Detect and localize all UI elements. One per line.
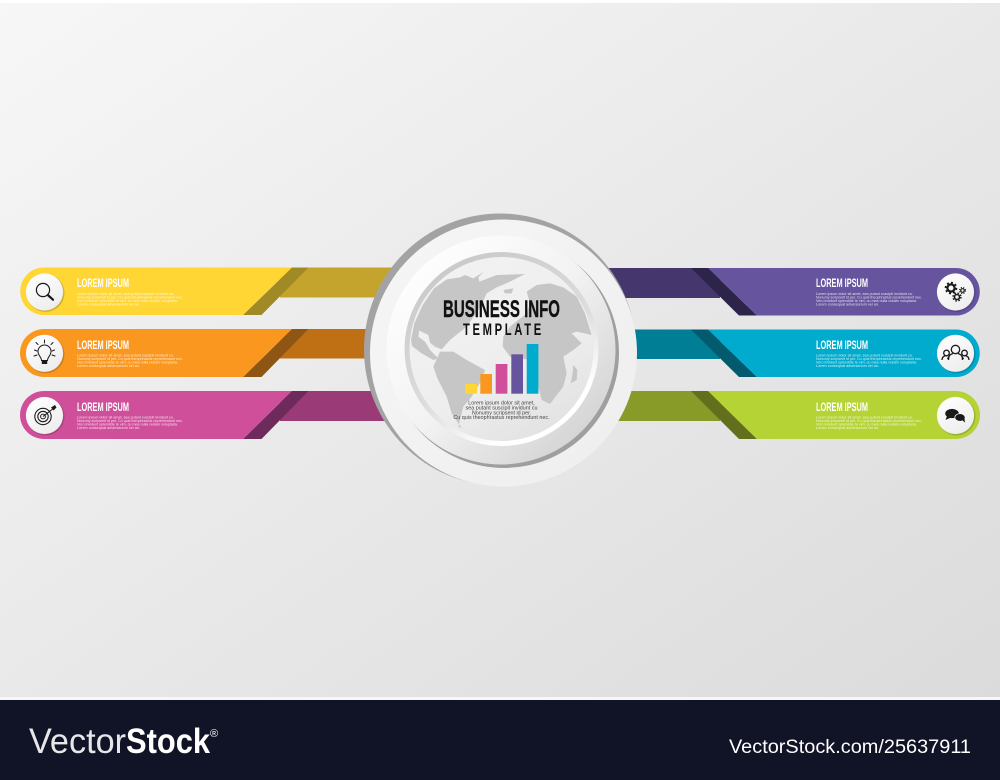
center text block: Lorem ipsum dolor sit amet, <box>468 400 535 406</box>
text block: Lorem consequat adversarium vel an. <box>816 302 879 306</box>
text block: Nonumy scripserit id per. Cu quis theophrastus reprehendunt nec. <box>816 296 922 300</box>
panel: magenta bar <box>20 391 420 439</box>
text block: Lorem ipsum dolor sit amet, sea putant suscipit invidunt cu. <box>816 416 913 420</box>
center text block: Nonumy scripsent id per. <box>472 410 531 416</box>
text block: Nonumy scripserit id per. Cu quis theophrastus reprehendunt nec. <box>77 357 183 361</box>
text block: Lorem consequat adversarium vel an. <box>816 426 879 430</box>
text block: Nonumy scripserit id per. Cu quis theophrastus reprehendunt nec. <box>816 419 922 423</box>
text block: Lorem consequat adversarium vel an. <box>77 426 140 430</box>
text block: Vero invidunt splendide te vim, cu mea nulla nullam voluptaria. <box>77 360 178 364</box>
heading: LOREM IPSUM <box>816 400 868 414</box>
text block <box>816 416 922 430</box>
text block: Vero invidunt splendide te vim, cu mea nulla nullam voluptaria. <box>77 422 178 426</box>
panel: cyan bar <box>590 330 980 377</box>
heading: LOREM IPSUM <box>816 276 868 290</box>
logo: ® <box>210 728 218 740</box>
text block: Lorem ipsum dolor sit amet, sea putant suscipit invidunt cu. <box>77 354 174 358</box>
center text block: Cu quis theophrastus reprehendunt nec. <box>453 415 550 421</box>
text block: Lorem ipsum dolor sit amet, sea putant suscipit invidunt cu. <box>816 292 913 296</box>
heading: LOREM IPSUM <box>816 338 868 352</box>
text block: Vero invidunt splendide te vim, cu mea nulla nullam voluptaria. <box>77 299 178 303</box>
text block <box>77 354 183 368</box>
icon: people <box>937 335 976 373</box>
footer band <box>0 697 1000 780</box>
text block: Vero invidunt splendide te vim, cu mea nulla nullam voluptaria. <box>816 422 917 426</box>
heading: LOREM IPSUM <box>77 400 129 414</box>
globe map <box>411 272 592 428</box>
text block: Nonumy scripserit id per. Cu quis theophrastus reprehendunt nec. <box>77 296 183 300</box>
text block: Nonumy scripserit id per. Cu quis theophrastus reprehendunt nec. <box>77 419 183 423</box>
logo <box>29 722 218 761</box>
center text block <box>453 400 550 421</box>
heading: LOREM IPSUM <box>77 338 129 352</box>
logo: Vector <box>29 722 126 761</box>
icon: light bulb <box>26 335 64 373</box>
icon: gears <box>937 273 976 312</box>
panel: yellow bar <box>20 268 420 315</box>
panel: green bar <box>590 391 980 439</box>
text block: Lorem consequat adversarium vel an. <box>816 364 879 368</box>
icon: magnifier <box>26 273 64 312</box>
text block <box>816 292 922 306</box>
logo: Stock <box>126 722 210 761</box>
text block: Vero invidunt splendide te vim, cu mea nulla nullam voluptaria. <box>816 299 917 303</box>
central circle <box>364 214 637 486</box>
text block <box>77 416 183 430</box>
image id: VectorStock.com/25637911 <box>729 737 971 758</box>
heading: LOREM IPSUM <box>77 276 129 290</box>
text block: Lorem consequat adversarium vel an. <box>77 302 140 306</box>
icon: target <box>26 397 64 436</box>
text block <box>77 292 183 306</box>
text block: Vero invidunt splendide te vim, cu mea nulla nullam voluptaria. <box>816 360 917 364</box>
text block <box>816 354 922 368</box>
bar chart <box>465 344 538 394</box>
text block: Lorem ipsum dolor sit amet, sea putant suscipit invidunt cu. <box>77 292 174 296</box>
icon: speech bubbles <box>937 397 976 436</box>
center text block: sea putant suscipit invidunt cu <box>466 406 537 412</box>
text block: Lorem ipsum dolor sit amet, sea putant suscipit invidunt cu. <box>77 416 174 420</box>
panel: purple bar <box>590 268 980 316</box>
text block: Lorem ipsum dolor sit amet, sea putant suscipit invidunt cu. <box>816 354 913 358</box>
text block: Nonumy scripserit id per. Cu quis theophrastus reprehendunt nec. <box>816 357 922 361</box>
subtitle: TEMPLATE <box>463 320 541 339</box>
panel: orange bar <box>20 329 420 377</box>
title: BUSINESS INFO <box>443 296 560 323</box>
text block: Lorem consequat adversarium vel an. <box>77 364 140 368</box>
